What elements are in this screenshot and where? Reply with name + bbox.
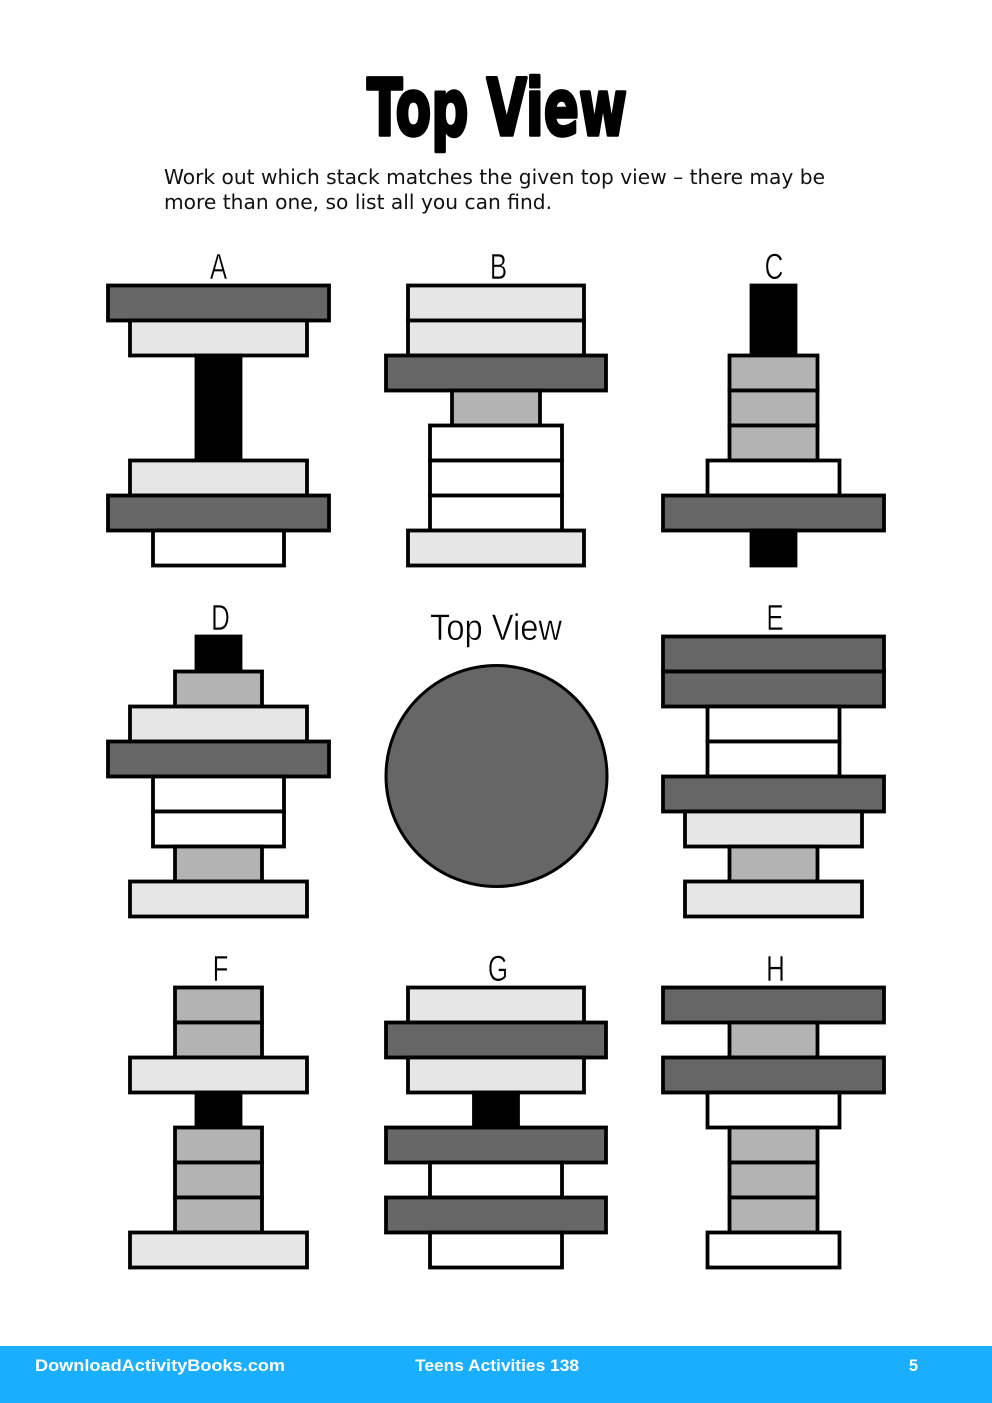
stack F <box>130 988 307 1268</box>
label C: C <box>765 247 783 287</box>
stack G <box>386 988 606 1268</box>
footer bar: DownloadActivityBooks.com <box>35 1356 285 1375</box>
label F: F <box>213 949 228 989</box>
top view label: Top View <box>430 607 562 648</box>
footer bar: 5 <box>909 1356 918 1375</box>
stack H <box>663 988 884 1268</box>
label G: G <box>488 949 508 989</box>
stack E <box>663 636 884 916</box>
instructions text: more than one, so list all you can find. <box>164 190 552 214</box>
label H: H <box>766 949 785 989</box>
stack D <box>108 636 329 916</box>
instructions text: Work out which stack matches the given top view – there may be <box>164 165 825 189</box>
footer bar <box>0 1346 992 1403</box>
title: Top View <box>367 64 627 154</box>
label A: A <box>210 247 227 287</box>
instructions text <box>164 165 825 214</box>
stack B <box>386 286 606 566</box>
label D: D <box>211 598 230 638</box>
label E: E <box>766 598 784 638</box>
footer bar: Teens Activities 138 <box>415 1356 579 1375</box>
label B: B <box>490 247 507 287</box>
stack C <box>663 286 884 566</box>
stack A <box>108 286 329 566</box>
top view circle <box>386 666 607 886</box>
